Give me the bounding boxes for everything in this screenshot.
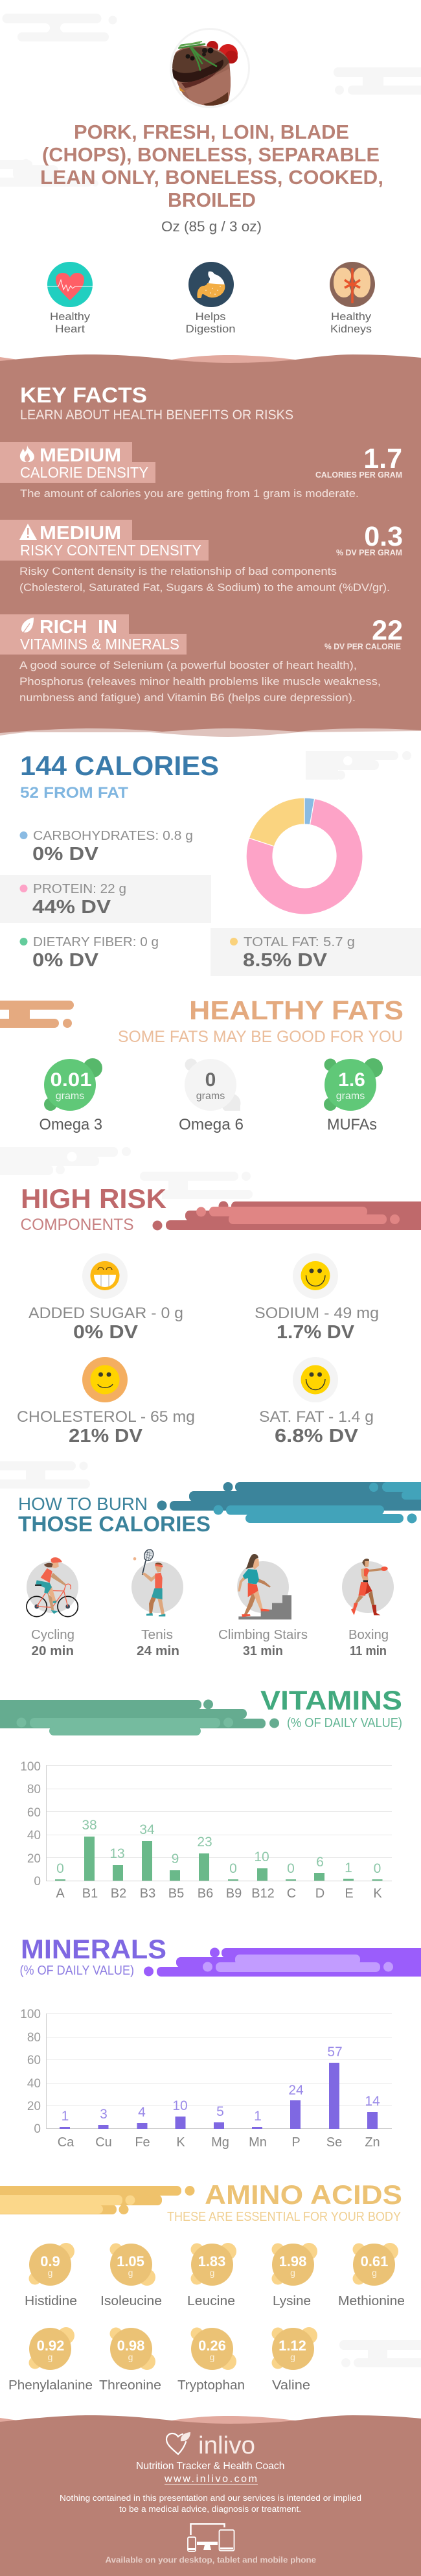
macro: protein: PROTEIN: 22 g (33, 882, 126, 896)
amino: phenylalanine: Phenylalanine (8, 2378, 93, 2393)
donut chart: macronutrients (246, 798, 363, 914)
bar chart: minerals: Se (326, 2135, 342, 2150)
fact: rich in vitamins and minerals: A good source of Selenium (a powerful booster of heart health), (19, 659, 357, 671)
amino: valine: 1.12 (279, 2338, 306, 2354)
amino: isoleucine (100, 2244, 162, 2308)
fact: risky content density: RISKY CONTENT DENSITY (20, 542, 201, 559)
bar chart: minerals: Fe (135, 2135, 150, 2150)
amino: threonine (99, 2328, 161, 2393)
macro: total fat: 8.5% DV (243, 950, 328, 971)
bar chart: minerals: 4 (138, 2105, 146, 2120)
risk: cholesterol: 21% DV (69, 1426, 143, 1446)
amino: methionine: g (372, 2268, 377, 2278)
heading: amino acids: AMINO ACIDS (205, 2179, 402, 2210)
fat: omega 6: grams (196, 1091, 225, 1102)
bar chart: vitamins: 20 (27, 1852, 41, 1866)
disclaimer: to be a medical advice, diagnosis or treatment. (119, 2504, 301, 2514)
bar chart: minerals: 5 (216, 2104, 224, 2119)
macro: total fat: TOTAL FAT: 5.7 g (244, 935, 355, 949)
decoration: vitamins stripes (0, 1699, 279, 1735)
fact: calorie density: CALORIES PER GRAM (315, 470, 402, 480)
fat: omega 3: grams (56, 1091, 84, 1102)
bar chart: minerals: K (176, 2135, 185, 2150)
benefit: helps digestion: Helps (196, 310, 225, 323)
subheading: LEARN ABOUT HEALTH BENEFITS OR RISKS (20, 408, 293, 423)
macro: carbohydrates (19, 829, 193, 864)
fact: rich in vitamins and minerals: VITAMINS & MINERALS (20, 636, 179, 653)
heading: key facts: KEY FACTS (20, 383, 147, 407)
decorative cloud above burn section (0, 1461, 90, 1489)
risk: cholesterol: CHOLESTEROL - 65 mg (17, 1408, 195, 1426)
fact: calorie density: 1.7 (363, 443, 402, 474)
bar chart: minerals: Ca (58, 2135, 74, 2150)
bar chart: minerals: Zn (365, 2135, 380, 2150)
fact: calorie density: CALORIE DENSITY (20, 464, 148, 481)
exercise: boxing: Boxing (348, 1628, 389, 1642)
amino: leucine: Leucine (187, 2294, 235, 2308)
bar chart: vitamins (20, 1760, 392, 1901)
bar chart: minerals: Mn (249, 2135, 267, 2150)
fat: omega 3: Omega 3 (39, 1116, 102, 1133)
amino: isoleucine: g (128, 2268, 133, 2278)
amino: leucine: 1.83 (198, 2253, 225, 2269)
bar chart: minerals: P (291, 2135, 301, 2150)
title: BROILED (168, 189, 256, 211)
exercise: climbing stairs: 31 min (243, 1644, 283, 1658)
risk: sodium: SODIUM - 49 mg (255, 1305, 379, 1322)
fact: rich in vitamins and minerals: numbness and fatigue) and Vitamin B6 (helps cure depression). (19, 691, 356, 704)
benefit: healthy kidneys: Healthy (331, 310, 372, 323)
bar chart: vitamins: E (345, 1886, 354, 1901)
bar chart: vitamins: 10 (254, 1850, 269, 1864)
heading: minerals: MINERALS (21, 1934, 166, 1964)
amino: valine: g (290, 2352, 295, 2362)
benefit: healthy heart: Heart (55, 323, 85, 335)
decoration: burn stripes (157, 1482, 421, 1523)
heading: vitamins: VITAMINS (260, 1685, 402, 1715)
risk: added sugar (28, 1253, 183, 1343)
food photo: grilled pork chop (171, 29, 249, 109)
fat: omega 6: Omega 6 (179, 1116, 244, 1133)
heading: high risk: HIGH RISK (21, 1183, 166, 1214)
bar chart: vitamins: 80 (27, 1783, 41, 1796)
fact: calorie density: MEDIUM (40, 445, 121, 466)
subheading: vitamins: (% OF DAILY VALUE) (287, 1716, 402, 1730)
bar chart: vitamins: 9 (172, 1851, 179, 1866)
decoration: high risk stripes (153, 1201, 421, 1230)
bar chart: minerals: 57 (327, 2045, 343, 2060)
fact: rich in vitamins and minerals: RICH IN (40, 617, 117, 638)
bar chart: vitamins: B5 (168, 1886, 184, 1901)
benefit: helps digestion (185, 262, 236, 335)
benefit: healthy kidneys: Kidneys (330, 323, 372, 335)
risk: cholesterol (17, 1357, 195, 1446)
subheading: calories from fat: 52 FROM FAT (20, 784, 128, 802)
bar chart: minerals: 40 (27, 2077, 41, 2091)
bar chart: vitamins: 0 (374, 1861, 381, 1876)
fact: rich in vitamins and minerals: % DV PER CALORIE (324, 642, 401, 651)
bar chart: minerals: Mg (211, 2135, 229, 2150)
bar chart: vitamins: 23 (197, 1835, 212, 1850)
fat: MUFAs (324, 1058, 383, 1133)
amino: tryptophan: g (210, 2352, 214, 2362)
bar chart: vitamins: D (315, 1886, 324, 1901)
risk: added sugar: ADDED SUGAR - 0 g (28, 1305, 183, 1322)
exercise: boxing: 11 min (350, 1644, 387, 1658)
amino: histidine: Histidine (25, 2294, 77, 2308)
bar chart: vitamins: 0 (287, 1861, 295, 1876)
decorative cloud behind title (0, 159, 98, 187)
amino: tryptophan: 0.26 (198, 2338, 226, 2354)
exercise: tennis (131, 1548, 183, 1658)
decorative cloud top left (3, 14, 117, 41)
fat: MUFAs: 1.6 (338, 1069, 365, 1091)
fact: risky content density: MEDIUM (40, 523, 121, 544)
bar chart: minerals: 1 (254, 2109, 262, 2124)
decoration: healthy fats stripes (0, 1001, 74, 1028)
exercise: climbing stairs: Climbing Stairs (218, 1628, 308, 1642)
bar chart: minerals: 20 (27, 2100, 41, 2113)
risk: added sugar: 0% DV (73, 1322, 139, 1343)
bar chart: minerals: 10 (172, 2098, 188, 2113)
bar chart: minerals: 0 (34, 2122, 41, 2136)
panel: key facts (0, 354, 421, 737)
heading: healthy fats: HEALTHY FATS (189, 995, 404, 1025)
bar chart: minerals (20, 2008, 392, 2150)
title (40, 121, 383, 211)
bar chart: vitamins: A (56, 1886, 65, 1901)
fact: risky content density: 0.3 (364, 521, 403, 552)
benefit: helps digestion: Digestion (185, 323, 236, 335)
fact: risky content density: Risky Content density is the relationship of bad components (19, 565, 337, 577)
amino: lysine: 1.98 (279, 2253, 306, 2269)
fact: risky content density: % DV PER GRAM (336, 548, 402, 557)
macro: total fat (210, 928, 421, 976)
fact: calorie density (0, 442, 402, 500)
amino: methionine: 0.61 (361, 2253, 388, 2269)
amino: threonine: g (128, 2352, 133, 2362)
amino: lysine: Lysine (273, 2294, 311, 2308)
bar chart: minerals: 3 (100, 2107, 108, 2122)
benefit: healthy kidneys (330, 262, 375, 335)
bar chart: minerals: 100 (20, 2008, 41, 2021)
risk: sodium: 1.7% DV (277, 1322, 355, 1343)
subheading: healthy fats: SOME FATS MAY BE GOOD FOR YOU (118, 1028, 403, 1046)
macro: protein: 44% DV (32, 897, 111, 918)
decorative cloud top right (334, 67, 421, 95)
logo: inlivo (166, 2432, 255, 2459)
fact: rich in vitamins and minerals (0, 614, 403, 704)
icon: devices (188, 2524, 234, 2551)
amino: methionine: Methionine (338, 2294, 405, 2308)
bar chart: minerals: 60 (27, 2054, 41, 2067)
amino: valine (272, 2327, 317, 2393)
amino: leucine (187, 2243, 236, 2308)
bar chart: vitamins: B1 (82, 1886, 98, 1901)
bar chart: vitamins: C (287, 1886, 296, 1901)
bar chart: vitamins: 1 (345, 1861, 352, 1875)
bar chart: vitamins: 34 (139, 1822, 155, 1837)
tagline: Nutrition Tracker & Health Coach (136, 2461, 285, 2472)
decoration: amino acids stripes (0, 2186, 194, 2214)
decorative cloud near calories (306, 751, 411, 780)
macro: carbohydrates: 0% DV (32, 844, 99, 864)
macro: dietary fiber: DIETARY FIBER: 0 g (33, 935, 159, 949)
bar chart: minerals: 1 (62, 2109, 69, 2124)
bar chart: vitamins: K (373, 1886, 382, 1901)
macro: carbohydrates: CARBOHYDRATES: 0.8 g (33, 829, 193, 843)
disclaimer (60, 2493, 361, 2514)
heading: 144 calories: 144 CALORIES (20, 750, 219, 781)
amino: tryptophan: Tryptophan (177, 2378, 245, 2393)
subheading: components: COMPONENTS (21, 1216, 133, 1234)
fat: omega 3: 0.01 (51, 1069, 92, 1091)
amino: methionine (338, 2243, 405, 2308)
bar chart: minerals: 80 (27, 2031, 41, 2045)
amino: tryptophan (177, 2328, 245, 2393)
subheading: amino acids: THESE ARE ESSENTIAL FOR YOUR BODY (167, 2210, 401, 2224)
exercise: climbing stairs (218, 1554, 308, 1658)
exercise: tennis: 24 min (137, 1644, 179, 1658)
fact: risky content density: (Cholesterol, Saturated Fat, Sugars & Sodium) to the amount (%DV/gr). (19, 581, 390, 594)
exercise: tennis: Tenis (141, 1628, 173, 1642)
benefit: healthy heart (47, 262, 93, 335)
bar chart: vitamins: B2 (111, 1886, 126, 1901)
risk: saturated fat: SAT. FAT - 1.4 g (259, 1408, 374, 1426)
bar chart: vitamins: 38 (82, 1818, 97, 1833)
bar chart: vitamins: 13 (109, 1846, 125, 1861)
heading: how to burn: HOW TO BURN (18, 1494, 148, 1514)
amino: threonine: Threonine (99, 2378, 161, 2393)
exercise: cycling: Cycling (31, 1628, 74, 1642)
amino: phenylalanine: g (48, 2352, 52, 2362)
disclaimer: Nothing contained in this presentation and our services is intended or implied (60, 2493, 361, 2503)
fat: omega 6: 0 (205, 1069, 216, 1091)
macro: protein (0, 875, 211, 923)
amino: phenylalanine: 0.92 (37, 2338, 64, 2354)
title: (CHOPS), BONELESS, SEPARABLE (42, 143, 380, 166)
benefit: healthy heart: Healthy (50, 310, 91, 323)
bar chart: vitamins: 0 (56, 1861, 64, 1876)
bar chart: vitamins: 0 (229, 1861, 237, 1876)
amino: histidine (25, 2243, 77, 2308)
website link: www.inlivo.com (164, 2474, 257, 2485)
bar chart: minerals: Cu (95, 2135, 112, 2150)
bar chart: minerals: 14 (365, 2094, 380, 2109)
availability note: Available on your desktop, tablet and mobile phone (105, 2555, 316, 2565)
bar chart: minerals: 24 (288, 2083, 304, 2098)
bar chart: vitamins: B9 (226, 1886, 242, 1901)
fact: rich in vitamins and minerals: Phosphorus (releaves minor health problems like muscle weakness, (19, 675, 381, 688)
fat: omega 6 (179, 1059, 244, 1133)
bar chart: vitamins: 40 (27, 1829, 41, 1842)
amino: threonine: 0.98 (117, 2338, 144, 2354)
amino: lysine (272, 2243, 317, 2308)
decorative cloud near amino acids (339, 2340, 421, 2367)
risk: saturated fat (259, 1357, 374, 1446)
fat: MUFAs: grams (336, 1091, 365, 1102)
serving size: Oz (85 g / 3 oz) (161, 218, 262, 235)
fat: MUFAs: MUFAs (327, 1116, 377, 1133)
amino: valine: Valine (272, 2378, 310, 2393)
exercise: cycling: 20 min (31, 1644, 74, 1658)
footer panel (0, 2415, 421, 2576)
bar chart: vitamins: 100 (20, 1760, 41, 1774)
amino: isoleucine: 1.05 (117, 2253, 144, 2269)
amino: histidine: 0.9 (40, 2253, 60, 2269)
fat: omega 3 (39, 1058, 102, 1133)
macro: dietary fiber: 0% DV (32, 950, 99, 971)
heading: those calories: THOSE CALORIES (18, 1512, 210, 1536)
fact: risky content density (0, 520, 403, 594)
title: PORK, FRESH, LOIN, BLADE (74, 121, 349, 143)
bar chart: vitamins: 0 (34, 1875, 41, 1888)
exercise: cycling (27, 1557, 78, 1658)
amino: leucine: g (210, 2268, 214, 2278)
macro: dietary fiber (19, 935, 159, 971)
subheading: minerals: (% OF DAILY VALUE) (19, 1964, 134, 1978)
fact: rich in vitamins and minerals: 22 (372, 615, 403, 646)
amino: histidine: g (48, 2268, 52, 2278)
risk: saturated fat: 6.8% DV (275, 1426, 359, 1446)
bar chart: vitamins: B12 (251, 1886, 275, 1901)
amino: isoleucine: Isoleucine (100, 2294, 162, 2308)
decorative clouds above high risk (0, 1147, 253, 1199)
decoration: minerals stripes (144, 1948, 421, 1977)
exercise: boxing (342, 1559, 394, 1658)
risk: sodium (255, 1253, 379, 1343)
bar chart: vitamins: 6 (316, 1855, 324, 1870)
bar chart: vitamins: 60 (27, 1806, 41, 1820)
fact: calorie density: The amount of calories you are getting from 1 gram is moderate. (20, 487, 359, 500)
amino: lysine: g (290, 2268, 295, 2278)
bar chart: vitamins: B6 (198, 1886, 213, 1901)
amino: phenylalanine (8, 2327, 93, 2393)
bar chart: vitamins: B3 (140, 1886, 155, 1901)
logo: inlivo: inlivo (198, 2432, 255, 2459)
title: LEAN ONLY, BONELESS, COOKED, (40, 166, 383, 189)
